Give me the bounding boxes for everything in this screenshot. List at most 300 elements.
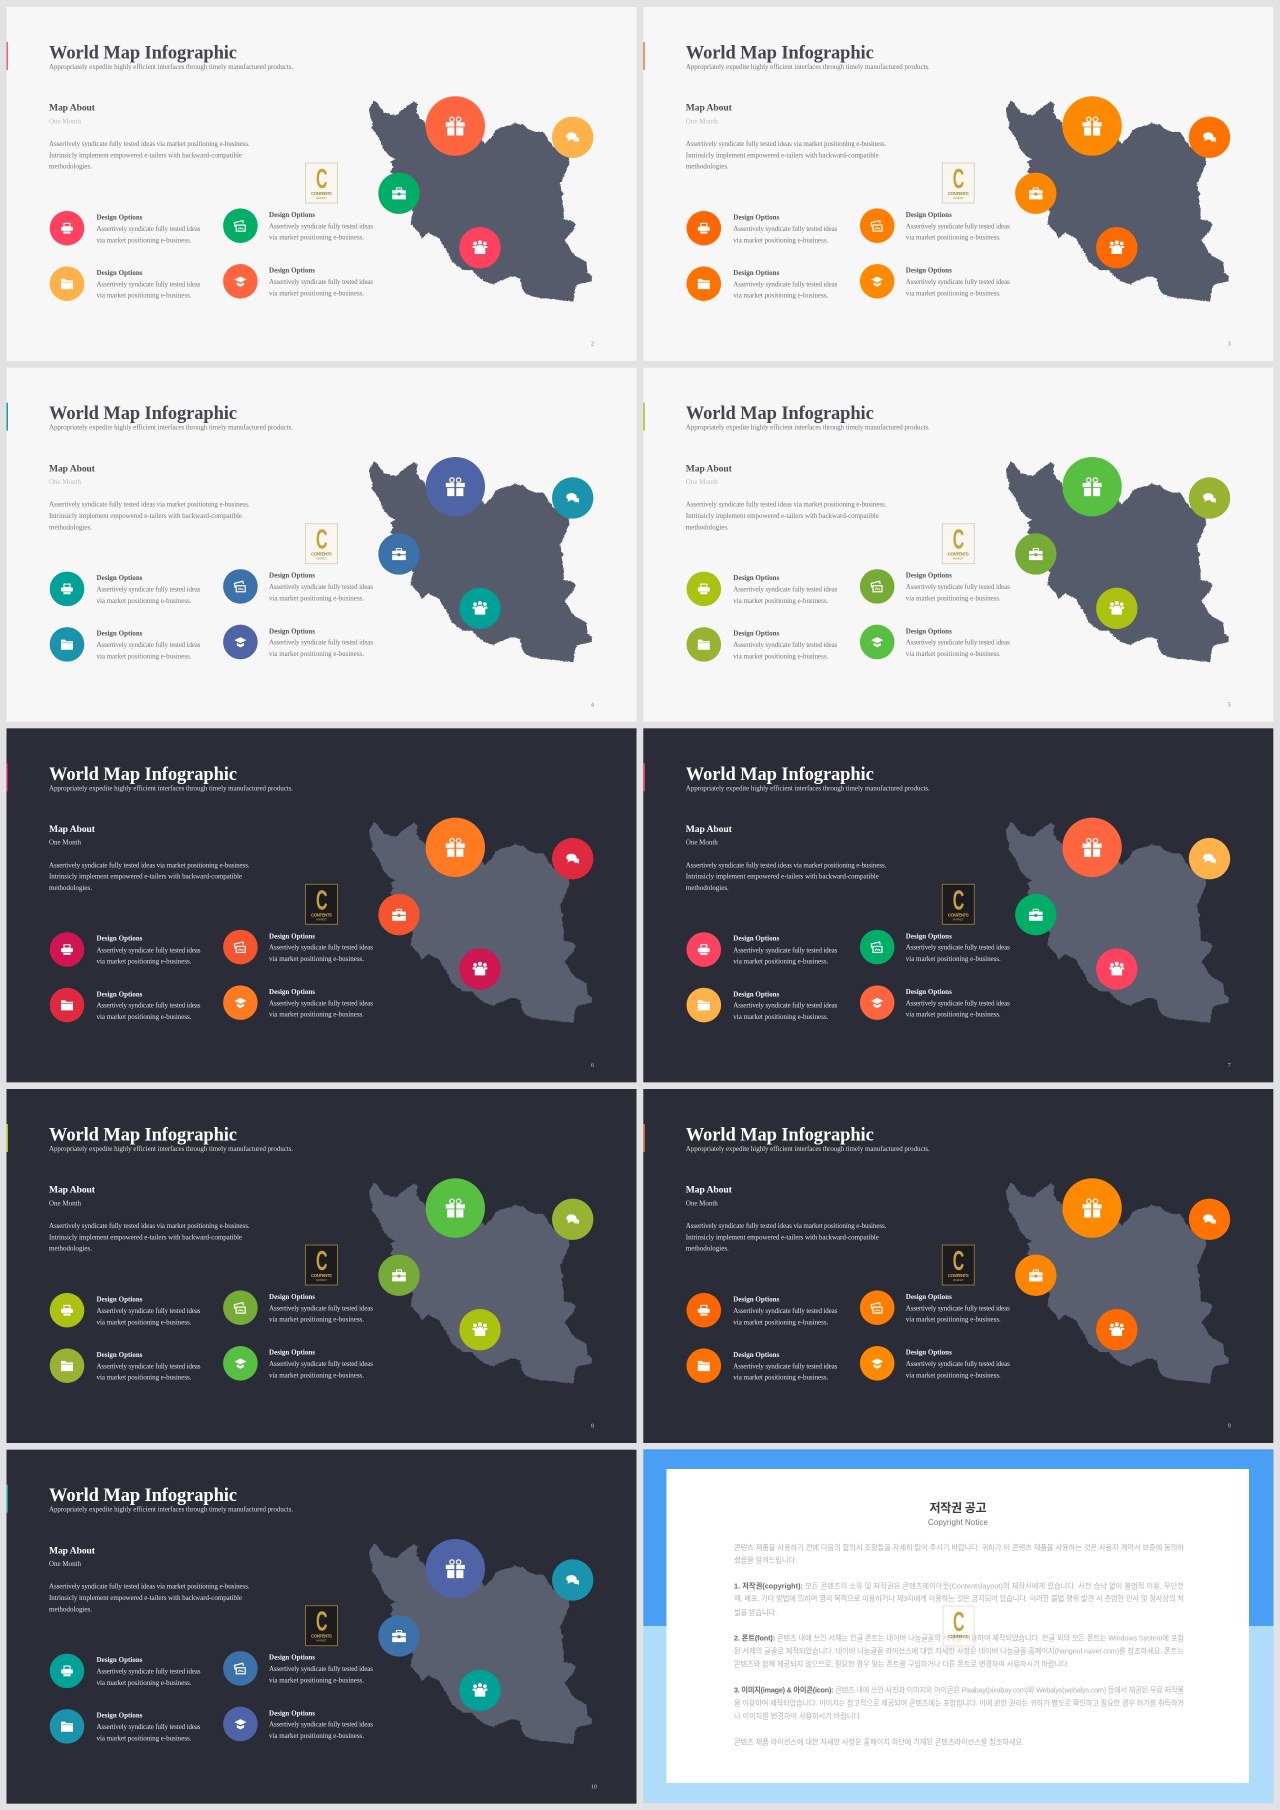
text block: methodologies. [686,163,729,171]
option 1: Assertively syndicate fully tested ideas [733,225,838,233]
map of Iran [1006,1183,1229,1384]
slide: page 7, dark coral theme [643,728,1273,1082]
option 3 [860,930,1010,964]
logo: C [953,524,964,555]
logo: CONTENTS [948,191,969,196]
option 3: Assertively syndicate fully tested ideas [269,1304,373,1312]
option 3 [223,930,373,964]
option 3: Design Options [906,1293,952,1301]
option 1: via market positioning e-business. [96,1679,192,1687]
option 2: via market positioning e-business. [733,652,829,660]
heading: map about: Map About [686,1185,733,1196]
option 2: Design Options [96,269,143,277]
option 4 [860,1346,1010,1381]
text block: Assertively syndicate fully tested ideas via market positioning e-business. [49,1583,250,1591]
option 2: Assertively syndicate fully tested ideas [96,1002,201,1010]
option 4 [223,1346,373,1381]
logo: C [316,884,328,915]
notice section 3: 을 이용하여 제작되었습니다. 이미지는 참고적으로 제공되며 콘텐츠에는 포함합니다. 이에 관한 권리는 귀하가 별도로 확인하고 필요한 경우 허가를 취득하거 [734,1698,1184,1707]
text block: methodologies. [49,163,92,171]
option 2 [50,1348,201,1383]
slide: page 5, light green theme [643,368,1273,722]
page number: 10 [591,1784,597,1790]
notice section 1 [734,1582,1184,1617]
text block: Assertively syndicate fully tested ideas via market positioning e-business. [49,501,250,509]
notice section 1: 벌을 받습니다. [734,1608,777,1617]
option 3: via market positioning e-business. [269,1676,364,1684]
logo: MARKET [953,1278,964,1282]
title: World Map Infographic [49,765,237,785]
marker: chat [552,477,593,519]
logo [942,163,974,203]
option 1: Assertively syndicate fully tested ideas [96,946,201,954]
marker: chat [552,1559,593,1601]
logo: CONTENTS [948,552,969,557]
option 1 [50,211,201,246]
map of Iran [369,461,592,662]
text block: methodologies. [686,523,729,531]
text block: Intrinsicly implement empowered e-tailers with backward-compatible [49,873,242,881]
title: World Map Infographic [49,1126,237,1146]
option 2: Assertively syndicate fully tested ideas [96,280,201,288]
marker: briefcase [1015,1255,1056,1296]
text block: Intrinsicly implement empowered e-tailers with backward-compatible [686,151,879,159]
notice section 2: 2. 폰트(font): 콘텐츠 내에 쓰인 서체는 한글 폰트는 네이버 나눔글꼴의 서체를 사용하여 제작되었습니다. 한글 외의 모든 폰트는 Windows System에 포함 [734,1634,1184,1643]
logo: MARKET [316,1639,327,1643]
option 1: Design Options [733,1295,780,1303]
logo: MARKET [316,557,327,561]
option 2: via market positioning e-business. [96,652,192,660]
heading: map about: One Month [49,478,82,486]
logo: C [953,163,964,194]
option 1: Design Options [733,574,780,582]
option 2: Design Options [733,269,780,277]
logo [942,884,974,924]
option 3: Design Options [269,572,315,580]
notice intro: 콘텐츠 제품을 사용하기 전에 다음의 합의서 조항들을 자세히 읽어 주시기 바랍니다. 귀하가 이 콘텐츠 제품을 사용하는 것은 사용자 계약서 보증에 동의하 [734,1543,1184,1552]
heading: map about: Map About [686,824,733,835]
logo: CONTENTS [311,552,332,557]
option 4: via market positioning e-business. [906,289,1001,297]
slide: page 4, light blue theme [6,368,636,722]
option 2: via market positioning e-business. [96,1374,192,1382]
logo: CONTENTS [311,191,332,196]
option 2: Design Options [733,990,780,998]
option 4 [223,1707,373,1741]
marker: gift [1062,457,1122,516]
option 2: Assertively syndicate fully tested ideas [733,641,838,649]
option 2: Design Options [733,630,780,638]
heading: map about [686,1185,733,1207]
heading: map about [49,103,96,125]
logo: CONTENTS [311,1634,332,1639]
option 2: via market positioning e-business. [96,292,192,300]
slide: page 9, dark orange theme [643,1089,1273,1443]
notice section 2: 된 서체의 글꼴로 제작되었습니다. 네이버 나눔글꼴 라이선스에 대한 자세한 사항은 네이버 나눔글꼴 홈페이지(hangeul.naver.com)를 참조하세요. 폰트는 [734,1647,1184,1656]
logo: CONTENTS [948,1273,969,1278]
option 1 [50,932,201,967]
option 3: Assertively syndicate fully tested ideas [906,583,1010,591]
slide: page 2, light coral theme [6,7,636,361]
logo: MARKET [316,1278,327,1282]
text block: Assertively syndicate fully tested ideas via market positioning e-business. [686,861,887,869]
option 2: Assertively syndicate fully tested ideas [96,1723,201,1731]
heading: map about: Map About [686,103,733,114]
text block: methodologies. [686,1245,729,1253]
option 3 [223,1651,373,1686]
option 2: via market positioning e-business. [733,292,829,300]
option 3: via market positioning e-business. [269,955,364,963]
option 3: via market positioning e-business. [906,1316,1001,1324]
notice section 2 [734,1634,1184,1668]
marker: team [1096,227,1138,268]
option 1 [686,1293,838,1328]
notice section 1: 1. 저작권(copyright): 모든 콘텐츠의 소유 및 저작권은 콘텐츠레이아웃(Contentslayout)의 제작사에게 있습니다. 사전 승낙 없이 불법적 이용, 무단전 [734,1582,1184,1591]
option 3 [223,208,373,243]
logo: C [316,524,328,555]
marker: chat [552,838,593,879]
logo [306,1606,338,1646]
logo: C [953,884,964,915]
option 3: via market positioning e-business. [269,594,364,602]
page number: 6 [591,1063,594,1069]
logo [306,524,338,564]
heading: map about: One Month [686,1199,718,1207]
option 1: Assertively syndicate fully tested ideas [733,586,838,594]
option 1 [50,1293,201,1328]
heading: map about: One Month [686,478,718,486]
option 3: Design Options [906,211,952,219]
text block: methodologies. [49,1605,92,1613]
subtitle: Appropriately expedite highly efficient interfaces through timely manufactured products. [49,1145,293,1153]
option 1: via market positioning e-business. [733,236,829,244]
page number: 7 [1228,1063,1231,1069]
marker: briefcase [378,533,420,575]
logo: C [316,1606,328,1637]
option 1: Assertively syndicate fully tested ideas [96,1668,201,1676]
option 4: via market positioning e-business. [906,1011,1001,1019]
option 2 [50,1709,201,1744]
marker: gift [1062,96,1122,156]
page number: 3 [1228,342,1231,348]
heading: map about [49,824,96,847]
option 4: Assertively syndicate fully tested ideas [906,999,1010,1007]
page number: 8 [591,1424,594,1430]
option 4: Design Options [269,1709,315,1717]
marker: chat [552,1199,593,1240]
option 2 [686,627,838,662]
marker: chat [552,117,593,158]
heading: map about [686,824,733,847]
title: World Map Infographic [686,1126,874,1146]
option 4 [223,625,373,659]
option 1: via market positioning e-business. [733,1318,829,1326]
subtitle: Appropriately expedite highly efficient interfaces through timely manufactured products. [49,424,293,432]
option 2: Assertively syndicate fully tested ideas [96,641,201,649]
marker: briefcase [378,1255,420,1296]
option 1: via market positioning e-business. [96,958,192,966]
notice section 2: 콘텐츠와 함께 제공되지 않으므로, 필요한 경우 맞는 폰트를 구입하거나 다른 폰트로 변경하여 사용하시기 바랍니다. [734,1659,1070,1668]
subtitle: Appropriately expedite highly efficient interfaces through timely manufactured products. [49,784,293,792]
page number: 9 [1228,1424,1231,1430]
marker: team [459,1670,501,1711]
logo: CONTENTS [311,912,332,917]
subtitle: Appropriately expedite highly efficient interfaces through timely manufactured products. [49,1506,293,1514]
option 3: Design Options [269,211,315,219]
option 2: Assertively syndicate fully tested ideas [96,1362,201,1370]
option 4: Design Options [269,1349,315,1357]
option 4: via market positioning e-business. [269,1732,364,1740]
marker: briefcase [1015,533,1056,575]
map of Iran [369,101,592,302]
marker: team [1096,948,1138,990]
option 4: via market positioning e-business. [269,650,364,658]
marker: briefcase [378,894,420,935]
text block [686,140,887,171]
marker: team [1096,1309,1138,1350]
text block [686,861,887,892]
marker: gift [426,1539,485,1598]
text block [49,1222,250,1253]
option 4: Design Options [269,267,315,275]
option 4: Design Options [269,988,315,996]
option 3: Design Options [269,932,315,940]
option 2 [50,627,201,662]
option 2: via market positioning e-business. [96,1734,192,1742]
logo [942,524,974,564]
heading: map about: One Month [686,117,718,125]
option 1: Assertively syndicate fully tested ideas [733,1307,838,1315]
notice intro: 셨음을 알려드립니다. [734,1555,797,1564]
option 4: via market positioning e-business. [269,1011,364,1019]
subtitle: Appropriately expedite highly efficient interfaces through timely manufactured products. [686,63,930,71]
heading: map about: One Month [49,1560,82,1568]
text block [49,1583,250,1613]
logo: C [316,1245,328,1276]
option 2 [50,266,201,301]
text block: Assertively syndicate fully tested ideas via market positioning e-business. [49,861,250,869]
text block: Assertively syndicate fully tested ideas via market positioning e-business. [49,1222,250,1230]
option 1: Assertively syndicate fully tested ideas [96,225,201,233]
marker: chat [1189,477,1230,519]
option 1: Assertively syndicate fully tested ideas [733,946,838,954]
option 4: Design Options [906,267,952,275]
heading: map about [686,463,733,486]
option 2 [686,988,838,1022]
text block: Intrinsicly implement empowered e-tailers with backward-compatible [686,873,879,881]
marker: gift [426,818,485,877]
text block: Intrinsicly implement empowered e-tailers with backward-compatible [49,151,242,159]
option 2: via market positioning e-business. [96,1013,192,1021]
option 2: via market positioning e-business. [733,1374,829,1382]
heading: map about: Map About [49,463,96,474]
map of Iran [1006,822,1229,1023]
option 4 [223,264,373,299]
logo: C [953,1606,964,1637]
option 2: Design Options [96,1712,143,1720]
option 2: Design Options [96,630,143,638]
option 3 [223,1290,373,1325]
title: World Map Infographic [686,404,874,424]
option 2: Assertively syndicate fully tested ideas [733,1362,838,1370]
subtitle: Appropriately expedite highly efficient interfaces through timely manufactured products. [49,63,293,71]
option 3: via market positioning e-business. [906,594,1001,602]
option 4: Assertively syndicate fully tested ideas [269,1721,373,1729]
option 4: Assertively syndicate fully tested ideas [269,999,373,1007]
logo: MARKET [953,917,964,921]
logo: MARKET [316,196,327,200]
marker: chat [1189,838,1230,879]
marker: briefcase [378,1615,420,1657]
logo: MARKET [953,557,964,561]
map of Iran [369,822,592,1023]
marker: gift [426,457,485,516]
marker: team [459,1309,501,1350]
heading: map about: Map About [49,103,96,114]
heading: map about: Map About [49,1185,96,1196]
option 3: via market positioning e-business. [906,234,1001,242]
text block: methodologies. [49,1245,92,1253]
notice footer line: 콘텐츠 제품 라이선스에 대한 자세한 사항은 홈페이지 하단에 기재된 콘텐츠라이선스를 참조하세요. [734,1738,1024,1747]
option 3 [223,569,373,604]
option 1 [686,932,838,967]
option 1 [686,572,838,606]
option 4 [223,985,373,1020]
notice section 3 [734,1685,1184,1721]
notice section 1: 재, 배포, 기타 방법에 의하여 영리 목적으로 이용하거나 제3자에게 이용하는 것은 금지되어 있습니다. 이러한 불법 행위 발견 시 준엄한 민사 및 형사상의 처 [734,1594,1184,1603]
page number: 5 [1228,702,1231,708]
marker: team [459,588,501,629]
text block [686,501,887,531]
panel: copyright notice [643,1449,1274,1803]
heading: map about: One Month [49,117,82,125]
option 2: Assertively syndicate fully tested ideas [733,1002,838,1010]
option 1: Assertively syndicate fully tested ideas [96,1307,201,1315]
text block: methodologies. [49,523,92,531]
option 1: Design Options [733,935,780,943]
option 3 [860,569,1010,604]
heading: map about: Map About [49,1545,96,1556]
text block [686,1222,887,1253]
text block: Intrinsicly implement empowered e-tailers with backward-compatible [686,512,879,520]
text block: Intrinsicly implement empowered e-tailers with backward-compatible [49,1594,242,1602]
option 3: Assertively syndicate fully tested ideas [906,1304,1010,1312]
heading: map about: Map About [49,824,96,835]
map of Iran [1006,101,1229,302]
text block: Intrinsicly implement empowered e-tailers with backward-compatible [49,512,242,520]
option 3: Design Options [269,1293,315,1301]
option 4: via market positioning e-business. [269,289,364,297]
notice section 3: 나 이미지를 변경하여 사용하시기 바랍니다. [734,1712,862,1721]
option 4 [860,264,1010,299]
text block: methodologies. [49,884,92,892]
slide: page 10, dark blue theme [6,1450,636,1804]
marker: briefcase [378,173,420,214]
option 2: Design Options [96,1351,143,1359]
option 3: Design Options [269,1654,315,1662]
heading: map about: One Month [686,839,718,847]
heading: map about [49,1185,96,1207]
option 4 [860,985,1010,1020]
title: World Map Infographic [49,1486,237,1506]
heading: map about [686,103,733,125]
option 1: Assertively syndicate fully tested ideas [96,586,201,594]
option 4: Design Options [906,627,952,635]
page number: 4 [591,702,594,708]
option 1: Design Options [96,574,143,582]
marker: gift [1062,1178,1122,1238]
text block [49,861,250,892]
option 2 [686,1348,838,1383]
option 4: Assertively syndicate fully tested ideas [269,278,373,286]
subtitle: Appropriately expedite highly efficient interfaces through timely manufactured products. [686,424,930,432]
option 3: Design Options [906,572,952,580]
logo: C [953,1245,964,1276]
option 1: via market positioning e-business. [733,597,829,605]
map of Iran [1006,461,1229,662]
slide: page 6, dark red theme [6,728,636,1082]
option 1 [686,211,838,246]
option 3: Assertively syndicate fully tested ideas [269,944,373,952]
marker: chat [1189,117,1230,158]
heading: map about [49,463,96,486]
option 1 [50,1654,201,1688]
option 1: via market positioning e-business. [733,958,829,966]
text block [49,501,250,531]
option 3: via market positioning e-business. [269,1316,364,1324]
option 3: via market positioning e-business. [906,955,1001,963]
option 4: Assertively syndicate fully tested ideas [269,1360,373,1368]
text block: Intrinsicly implement empowered e-tailers with backward-compatible [686,1233,879,1241]
text block: Assertively syndicate fully tested ideas via market positioning e-business. [49,140,250,148]
option 2 [686,266,838,301]
title: World Map Infographic [49,404,237,424]
logo [943,1606,974,1646]
option 4: Assertively syndicate fully tested ideas [269,639,373,647]
option 1: Design Options [96,1295,143,1303]
logo: CONTENTS [311,1273,332,1278]
marker: gift [426,1178,485,1238]
marker: team [459,227,501,268]
text block: Intrinsicly implement empowered e-tailers with backward-compatible [49,1233,242,1241]
logo [306,884,338,924]
option 3: Assertively syndicate fully tested ideas [906,222,1010,230]
option 2: Design Options [96,990,143,998]
logo: CONTENTS [948,912,969,917]
option 1: Design Options [733,213,780,221]
option 4: via market positioning e-business. [906,650,1001,658]
option 2: via market positioning e-business. [733,1013,829,1021]
option 2: Assertively syndicate fully tested ideas [733,280,838,288]
option 4: Design Options [269,627,315,635]
logo [942,1245,974,1285]
notice intro [734,1543,1184,1564]
option 3: Assertively syndicate fully tested ideas [269,222,373,230]
option 3: Assertively syndicate fully tested ideas [269,1665,373,1673]
option 1: via market positioning e-business. [96,597,192,605]
marker: briefcase [1015,894,1056,935]
option 2 [50,988,201,1022]
option 1: via market positioning e-business. [96,236,192,244]
option 4: Design Options [906,988,952,996]
notice section 3: 3. 이미지(image) & 아이콘(icon): 콘텐츠 내에 쓰인 사진과 이미지와 아이콘은 Pixabay(pixabay.com)와 Webalys(webalys.com) 등에서 제공된 무료 저작물 [734,1685,1184,1694]
title: World Map Infographic [686,44,874,64]
page number: 2 [591,342,594,348]
logo: MARKET [316,917,327,921]
text block: Assertively syndicate fully tested ideas via market positioning e-business. [686,1222,887,1230]
option 3: Design Options [906,932,952,940]
heading: map about [49,1545,96,1568]
